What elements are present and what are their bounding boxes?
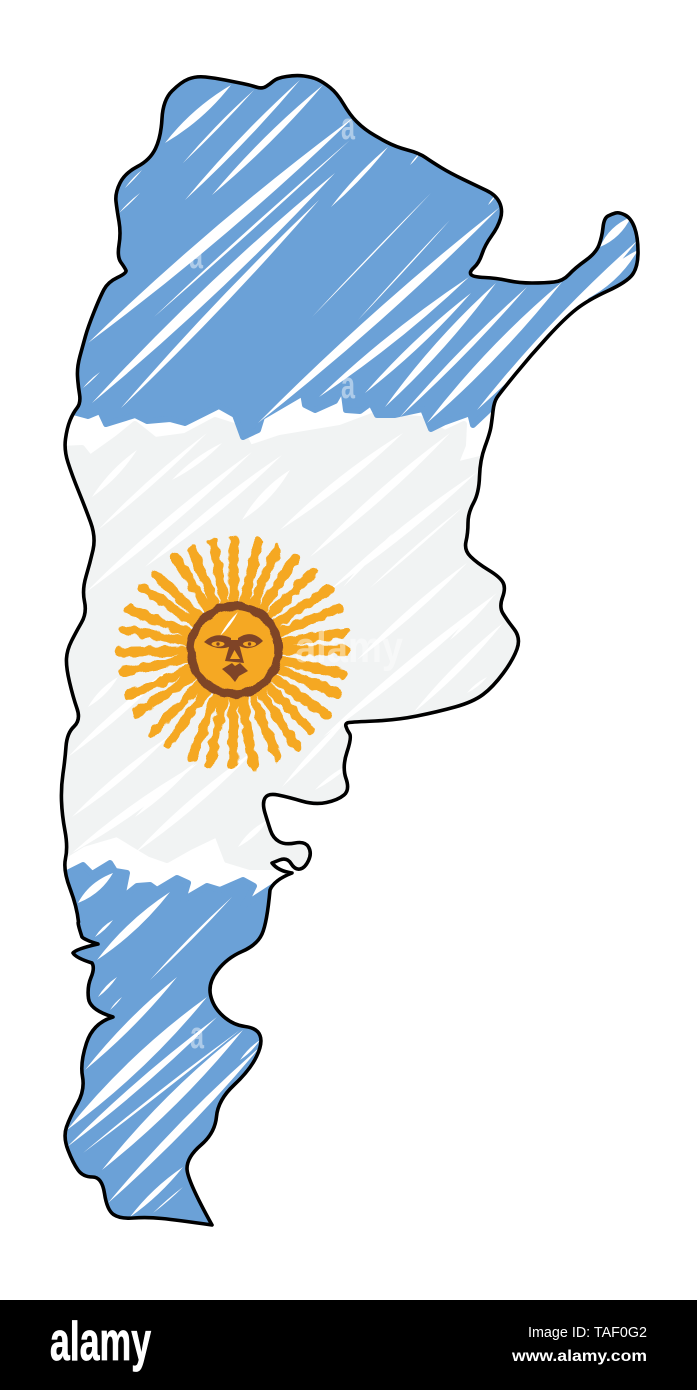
bottom band white scribble strokes xyxy=(67,873,260,1217)
footer bar xyxy=(0,1300,697,1390)
icon: sun of May xyxy=(120,539,347,765)
country outline xyxy=(61,76,638,1225)
watermark: alamy centre: alamy xyxy=(295,623,403,672)
map of Argentina xyxy=(60,74,640,1227)
sun ring xyxy=(190,606,278,694)
website: www.alamy.com xyxy=(511,1348,647,1365)
right eye xyxy=(238,634,263,648)
watermark: a mark 4: a xyxy=(190,1015,205,1057)
nose xyxy=(225,640,244,663)
sun disc xyxy=(190,605,280,695)
watermark: a mark 1: a xyxy=(189,235,204,277)
map fill clipped to country shape xyxy=(63,77,636,1223)
highlight on disc xyxy=(220,612,238,636)
top sky-blue band xyxy=(74,77,636,440)
white band scribble xyxy=(63,413,516,870)
mouth xyxy=(222,663,248,682)
watermark text xyxy=(189,106,403,1057)
sun rays xyxy=(120,539,347,765)
image id: Image ID: TAF0G2 xyxy=(528,1324,647,1341)
watermark: a mark 3: a xyxy=(341,365,356,407)
watermark: a mark 2: a xyxy=(341,106,356,148)
left eye xyxy=(204,635,231,648)
top band white scribble strokes xyxy=(83,80,638,423)
sun face xyxy=(204,634,263,682)
bottom sky-blue band xyxy=(66,860,272,1223)
alamy logo: alamy xyxy=(50,1310,151,1372)
